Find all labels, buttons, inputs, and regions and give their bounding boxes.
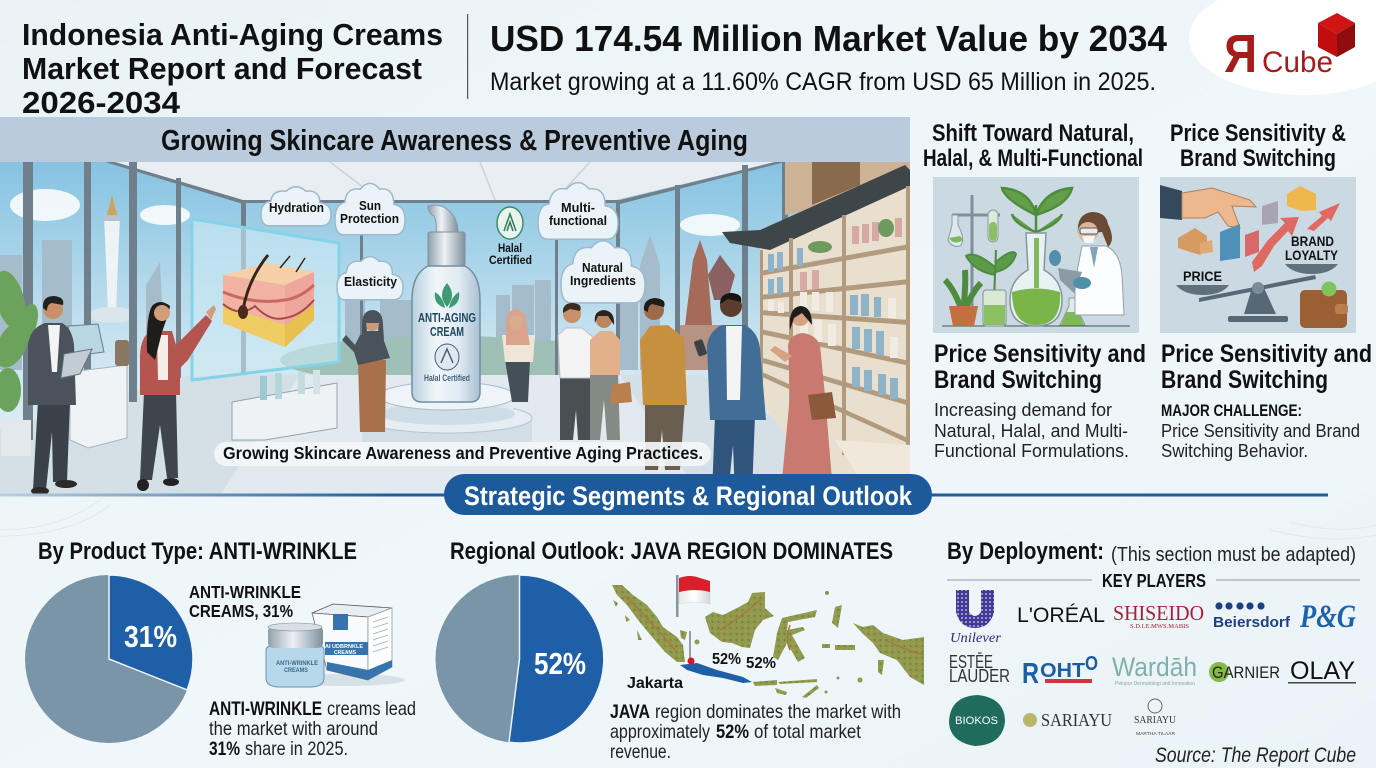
pie chart: 52 percent xyxy=(436,575,604,743)
trend description xyxy=(934,399,1129,461)
balance scale illustration: PRICE xyxy=(1183,269,1222,284)
trend subheading xyxy=(934,340,1146,394)
regional description: revenue. xyxy=(610,741,671,763)
benefit cloud: sun protection xyxy=(335,183,405,235)
panel: by product type xyxy=(25,538,416,760)
logo: beiersdorf: Beiersdorf xyxy=(1213,614,1291,631)
person: man in mustard shirt xyxy=(640,298,687,470)
caption pill: Growing Skincare Awareness and Preventive Aging Practices. xyxy=(223,443,703,463)
panel: by deployment and key players xyxy=(947,538,1360,767)
trend: shift toward natural, halal, multi-functional xyxy=(923,120,1146,461)
logo: biokos: BIOKOS xyxy=(955,715,998,727)
trend subheading: Brand Switching xyxy=(934,366,1102,394)
logo: sariayu emblem: SARIAYU xyxy=(1134,715,1176,726)
benefit cloud: multi-functional: functional xyxy=(549,214,607,228)
logo: garnier: GARNIER xyxy=(1212,663,1280,682)
challenge subheading: Brand Switching xyxy=(1161,366,1328,394)
pie label: CREAMS, 31% xyxy=(189,601,293,621)
challenge subheading xyxy=(1161,340,1372,394)
logo: RCube xyxy=(1189,0,1376,95)
logo: unilever: Unilever xyxy=(950,631,1002,646)
pagoda outside window xyxy=(680,240,735,370)
logo: rohto: O xyxy=(1085,653,1098,675)
product description: 31% xyxy=(209,738,240,760)
logo: olay: OLAY xyxy=(1290,657,1355,685)
product description xyxy=(209,698,416,760)
icon: cream jar and box: CREAMS xyxy=(284,668,308,674)
logo: biokos xyxy=(949,695,1005,746)
person: woman in peach top xyxy=(590,310,632,440)
trend subheading: Price Sensitivity and xyxy=(934,340,1146,368)
benefit cloud: sun protection: Sun xyxy=(359,199,381,213)
person: woman in red blazer xyxy=(137,302,216,491)
halal certified badge: Halal xyxy=(498,241,522,255)
panel heading: Regional Outlook: JAVA REGION DOMINATES xyxy=(450,538,893,565)
panel heading band xyxy=(0,117,910,162)
window frames xyxy=(23,162,788,440)
icon: cream jar and box: ANTI-WRINKLE xyxy=(276,660,319,667)
person: man in blue blazer xyxy=(694,293,766,495)
trend heading: Shift Toward Natural, xyxy=(932,120,1134,147)
logo: l'oreal: L'ORÉAL xyxy=(1017,604,1105,627)
map of indonesia: 52% xyxy=(746,655,776,672)
price vs loyalty arrows xyxy=(1252,203,1340,272)
logo: RCube: R xyxy=(1224,24,1257,84)
icon: cream jar and box xyxy=(266,604,405,687)
panel heading: By Product Type: ANTI-WRINKLE xyxy=(38,538,357,565)
logo: estee lauder xyxy=(949,652,1010,686)
regional description: of total market xyxy=(754,721,861,743)
benefit cloud: sun protection: Protection xyxy=(340,212,399,226)
halal certified badge: Certified xyxy=(489,253,532,267)
jakarta pin xyxy=(688,631,694,664)
panel: regional outlook xyxy=(436,538,924,763)
logo: rohto xyxy=(1022,653,1098,690)
icon: cream jar and box: AI UDBRNKLE xyxy=(325,644,363,650)
person: man in grey suit xyxy=(28,296,92,495)
key players heading: KEY PLAYERS xyxy=(1102,571,1206,591)
panel heading xyxy=(947,538,1356,566)
panel heading: By Deployment: xyxy=(947,538,1104,565)
challenge heading: Brand Switching xyxy=(1180,145,1336,172)
trend description: Increasing demand for xyxy=(934,399,1112,420)
pie chart: 52 percent: 52% xyxy=(534,646,586,681)
holographic skin screen xyxy=(192,219,339,380)
section banner: strategic segments xyxy=(0,474,1328,515)
challenge description xyxy=(1161,401,1360,461)
balance scale illustration: BRAND xyxy=(1291,234,1334,249)
regional description xyxy=(610,701,901,763)
market value headline: Market growing at a 11.60% CAGR from USD 65 Million in 2025. xyxy=(490,68,1156,96)
logo: estee lauder: LAUDER xyxy=(949,666,1010,686)
trend heading xyxy=(923,120,1143,172)
benefit cloud: natural ingredients: Natural xyxy=(582,261,623,275)
logo: beiersdorf xyxy=(1213,602,1291,631)
person: woman in beige hijab xyxy=(502,309,535,402)
challenge description: MAJOR CHALLENGE: xyxy=(1161,401,1302,420)
benefit cloud: elasticity xyxy=(337,257,403,300)
benefit cloud: multi-functional xyxy=(538,183,618,239)
pie chart: 31 percent xyxy=(25,575,193,743)
challenge heading: Price Sensitivity & xyxy=(1170,120,1346,147)
city skyline xyxy=(0,235,660,384)
logo: RCube: Cube xyxy=(1262,46,1333,79)
scientist xyxy=(1049,212,1124,315)
anti-aging cream bottle: Halal Certified xyxy=(424,373,470,383)
regional description: approximately xyxy=(610,721,710,743)
small flask xyxy=(1060,298,1085,325)
product description: ANTI-WRINKLE xyxy=(209,698,322,720)
anti-aging cream bottle: CREAM xyxy=(430,324,464,339)
product description: share in 2025. xyxy=(245,738,348,760)
pie label xyxy=(189,582,301,621)
market value headline xyxy=(490,18,1167,96)
benefit cloud: multi-functional: Multi- xyxy=(561,201,595,215)
trend heading: Halal, & Multi-Functional xyxy=(923,145,1143,172)
benefit cloud: natural ingredients: Ingredients xyxy=(570,274,636,288)
anti-aging cream bottle: ANTI-AGING xyxy=(418,310,476,325)
icon: cream jar and box: CREAMS xyxy=(334,650,357,656)
skin cross section xyxy=(223,255,314,347)
person: woman in grey hijab xyxy=(342,310,390,432)
map of indonesia: Jakarta xyxy=(627,675,683,692)
regional description: JAVA xyxy=(610,701,650,723)
logo: sariayu emblem: MARTHA TILAAR xyxy=(1136,731,1176,736)
report title: Market Report and Forecast xyxy=(22,52,422,86)
panel: growing skincare awareness xyxy=(0,117,910,495)
challenge description: Switching Behavior. xyxy=(1161,440,1308,461)
jar plant xyxy=(966,250,1016,326)
benefit cloud: elasticity: Elasticity xyxy=(344,275,397,289)
benefit cloud: hydration: Hydration xyxy=(269,201,324,215)
person: woman in pink dress xyxy=(770,306,836,495)
balance scale illustration xyxy=(1160,177,1356,333)
map of indonesia xyxy=(612,575,924,698)
round flask with plant xyxy=(1002,188,1072,326)
challenge heading xyxy=(1170,120,1346,172)
floor xyxy=(0,375,910,495)
logo: sariayu: SARIAYU xyxy=(1041,710,1112,730)
pie chart: 31 percent: 31% xyxy=(124,619,177,654)
product description: the market with around xyxy=(209,718,378,740)
ceiling xyxy=(115,162,775,200)
regional description: region dominates the market with xyxy=(655,701,901,723)
map of indonesia: 52% xyxy=(712,651,741,668)
java region highlight xyxy=(680,663,752,683)
product description: creams lead xyxy=(327,698,416,720)
logo: wardah: Wardāh xyxy=(1112,652,1197,682)
logo: shiseido: S.D.I.E.MWS.MABIS xyxy=(1130,624,1189,630)
logo: p&g: P&G xyxy=(1299,599,1356,635)
conical plant pot xyxy=(945,270,981,326)
person: man in white shirt xyxy=(558,303,594,440)
logo: estee lauder: ESTĒE xyxy=(949,652,993,672)
trend description: Functional Formulations. xyxy=(934,440,1129,461)
display table xyxy=(232,370,337,440)
logo: shiseido: SHISEIDO xyxy=(1113,601,1204,625)
report title xyxy=(22,18,443,120)
logo: sariayu emblem xyxy=(1134,699,1176,736)
balance scale illustration: LOYALTY xyxy=(1285,248,1338,263)
challenge description: Price Sensitivity and Brand xyxy=(1161,420,1360,441)
panel heading band: Growing Skincare Awareness & Preventive Aging xyxy=(161,125,748,157)
cosmetic shelves xyxy=(722,162,910,495)
report title: Indonesia Anti-Aging Creams xyxy=(22,18,443,52)
benefit cloud: hydration xyxy=(261,187,331,226)
regional description: 52% xyxy=(716,721,749,743)
trend description: Natural, Halal, and Multi- xyxy=(934,420,1128,441)
logo: rohto: OHT xyxy=(1040,660,1085,682)
showroom illustration xyxy=(0,162,910,495)
monas tower xyxy=(88,195,136,323)
reception desk xyxy=(68,324,129,448)
laboratory illustration xyxy=(933,177,1139,333)
challenge: price sensitivity and brand switching xyxy=(1160,120,1372,461)
halal certified badge xyxy=(489,207,532,267)
report title: 2026-2034 xyxy=(22,86,180,120)
logo: unilever xyxy=(950,590,1002,646)
pie label: ANTI-WRINKLE xyxy=(189,582,301,602)
anti-aging cream bottle xyxy=(412,205,480,402)
logo: wardah: Pelopor Dermatologi and Innovation xyxy=(1115,681,1195,687)
pedestal xyxy=(362,382,532,442)
icon: indonesian flag xyxy=(676,575,710,617)
benefit cloud: natural ingredients xyxy=(561,241,645,303)
logo: rohto: R xyxy=(1022,658,1039,690)
plant left xyxy=(0,267,43,456)
market value headline: USD 174.54 Million Market Value by 2034 xyxy=(490,18,1167,59)
section banner: strategic segments: Strategic Segments & Regional Outlook xyxy=(464,481,913,511)
